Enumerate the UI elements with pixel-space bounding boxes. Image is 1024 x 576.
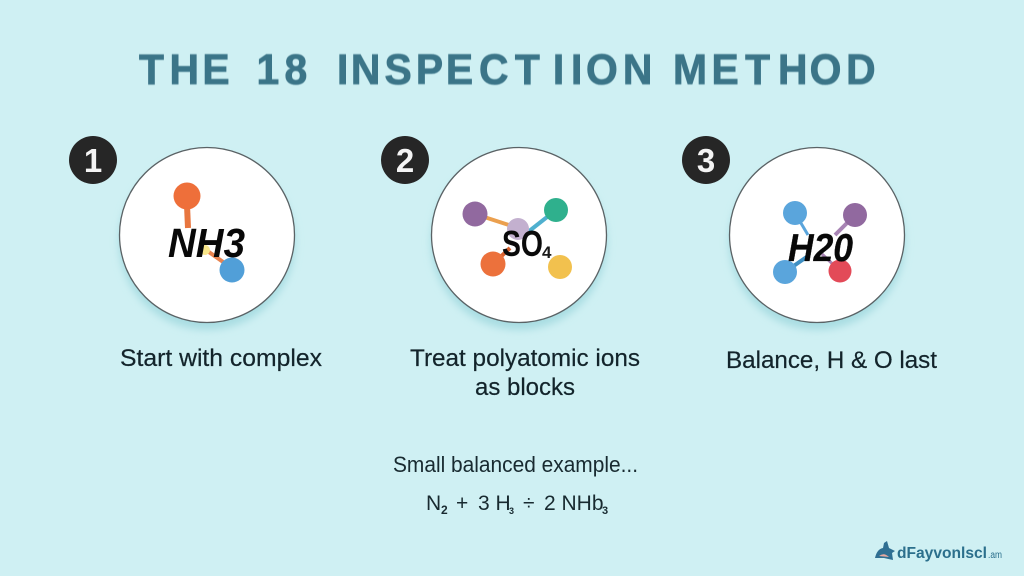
badge 3: 3 bbox=[697, 142, 715, 179]
example equation: 2 bbox=[441, 503, 448, 517]
caption 2: as blocks bbox=[475, 374, 575, 401]
logo text: dFayvonlscl bbox=[897, 545, 987, 562]
circle 3 bbox=[730, 148, 904, 322]
molecule H2O bbox=[773, 201, 867, 284]
badge 1: 1 bbox=[84, 142, 102, 179]
example equation: 3 bbox=[509, 506, 514, 516]
circle 1 bbox=[120, 148, 294, 322]
caption 2: Treat polyatomic ions bbox=[410, 345, 640, 372]
example equation: 3 H bbox=[478, 492, 511, 515]
example equation: 2 NHb bbox=[544, 492, 604, 515]
logo bbox=[875, 541, 1002, 562]
example equation: ÷ bbox=[523, 492, 535, 515]
example heading: Small balanced example... bbox=[393, 452, 638, 477]
example equation: 3 bbox=[602, 505, 608, 517]
molecule NH3 bbox=[168, 182, 245, 282]
circle shadow 3 bbox=[729, 154, 905, 330]
circle shadow 2 bbox=[431, 154, 607, 330]
logo text: .am bbox=[988, 550, 1002, 561]
panel: step 3 bbox=[682, 136, 937, 374]
example equation: + bbox=[456, 492, 468, 515]
title: THE bbox=[139, 45, 230, 93]
title bbox=[139, 45, 876, 93]
molecule NH3: NH3 bbox=[168, 220, 245, 266]
molecule SO4: SO bbox=[502, 223, 543, 264]
circle shadow 1 bbox=[119, 154, 295, 330]
molecule SO4: 4 bbox=[542, 243, 552, 262]
molecule SO4 bbox=[462, 198, 572, 279]
panel: step 2 bbox=[381, 136, 640, 401]
caption 1: Start with complex bbox=[120, 345, 322, 372]
title: 18 bbox=[257, 45, 307, 93]
badge 2: 2 bbox=[396, 142, 414, 179]
example equation bbox=[426, 492, 608, 517]
badge 3 bbox=[682, 136, 730, 184]
panel: step 1 bbox=[69, 136, 322, 372]
title: INSPECTIION bbox=[337, 45, 652, 93]
circle 2 bbox=[432, 148, 606, 322]
caption 2 bbox=[410, 345, 640, 401]
molecule H2O: H20 bbox=[788, 227, 853, 270]
title: METHOD bbox=[673, 45, 876, 93]
caption 3: Balance, H & O last bbox=[726, 347, 937, 374]
badge 2 bbox=[381, 136, 429, 184]
logo icon bbox=[875, 541, 895, 560]
example equation: N bbox=[426, 492, 441, 515]
badge 1 bbox=[69, 136, 117, 184]
